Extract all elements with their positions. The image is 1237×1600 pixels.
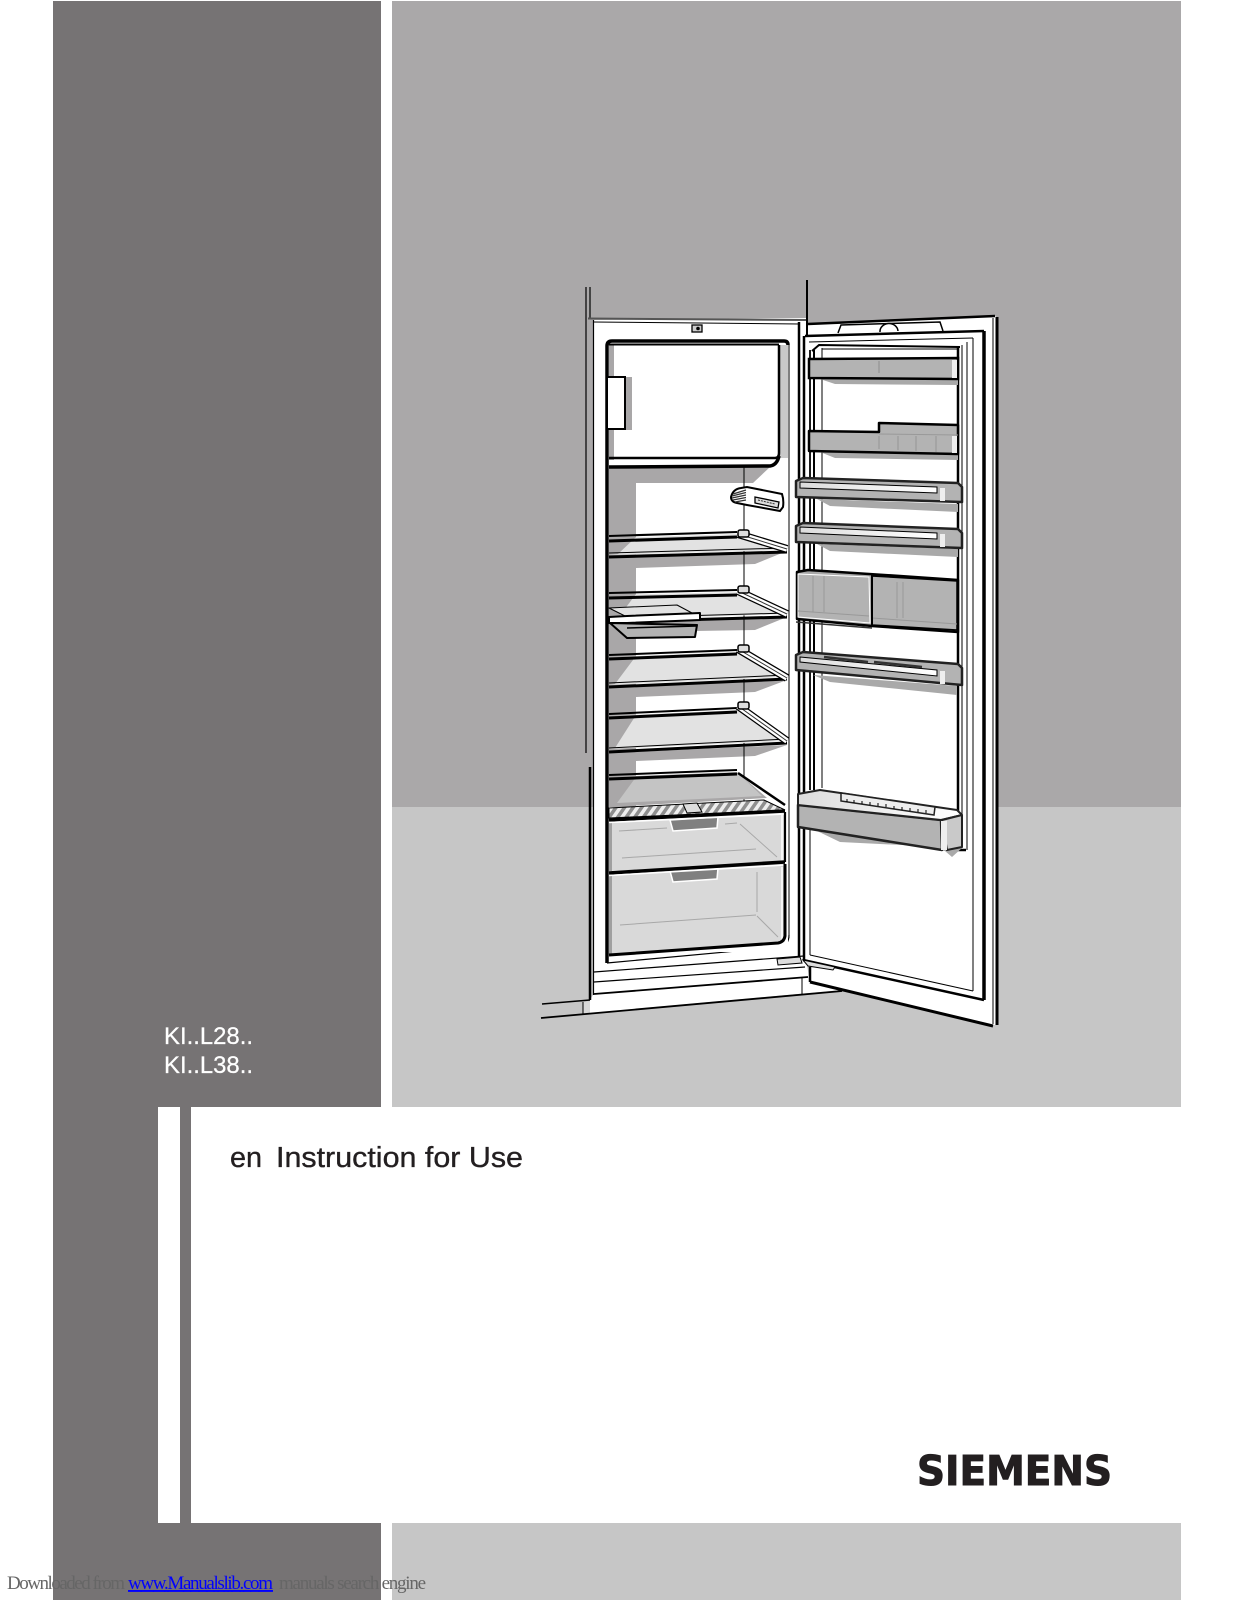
glass shelf 2 xyxy=(609,586,787,638)
fridge interior rear wall xyxy=(609,342,788,952)
door rack B xyxy=(809,423,958,460)
glass shelf 4 xyxy=(609,702,787,752)
model numbers: KI..L38.. xyxy=(164,1052,253,1079)
model numbers: KI..L28.. xyxy=(164,1023,253,1050)
door shelf F xyxy=(796,652,962,695)
door shelf D xyxy=(796,523,962,557)
footer: download notice: www.Manualslib.com xyxy=(128,1573,273,1594)
drawer 2 xyxy=(609,862,785,955)
drawer 1 xyxy=(609,811,785,871)
illustration: open built-in fridge xyxy=(541,280,998,1026)
glass shelf 3 xyxy=(609,645,787,687)
model numbers xyxy=(164,1023,253,1079)
door bottle bin xyxy=(798,790,962,857)
footer: download notice xyxy=(7,1573,426,1594)
cabinet body xyxy=(541,287,842,1018)
door top tab xyxy=(838,322,943,333)
footer: download notice: manuals search engine xyxy=(279,1573,426,1594)
freezer handle xyxy=(608,377,632,430)
open door xyxy=(777,280,998,1026)
panel: floor background xyxy=(392,807,1181,1107)
freezer compartment xyxy=(607,341,788,963)
panel: wall background xyxy=(392,1,1181,807)
panel: white title area xyxy=(158,1107,1181,1523)
logo: SIEMENS wordmark: SIEMENS xyxy=(917,1447,1112,1495)
panel: dark grey left column xyxy=(53,1,381,1600)
interior lamp xyxy=(731,487,783,511)
icon: top latch xyxy=(692,325,702,332)
door rack A xyxy=(809,358,958,385)
footer: download notice: Downloaded from xyxy=(7,1573,125,1594)
glass shelf 1 xyxy=(609,530,787,557)
heading: instruction for use: Instruction for Use xyxy=(276,1142,523,1174)
heading: instruction for use: en xyxy=(230,1142,262,1174)
small tray on shelf xyxy=(609,605,700,638)
panel: lower floor band xyxy=(392,1523,1181,1600)
crisper cover with grille xyxy=(609,770,785,818)
door shelf C xyxy=(796,478,962,512)
door storage boxes xyxy=(796,570,958,632)
